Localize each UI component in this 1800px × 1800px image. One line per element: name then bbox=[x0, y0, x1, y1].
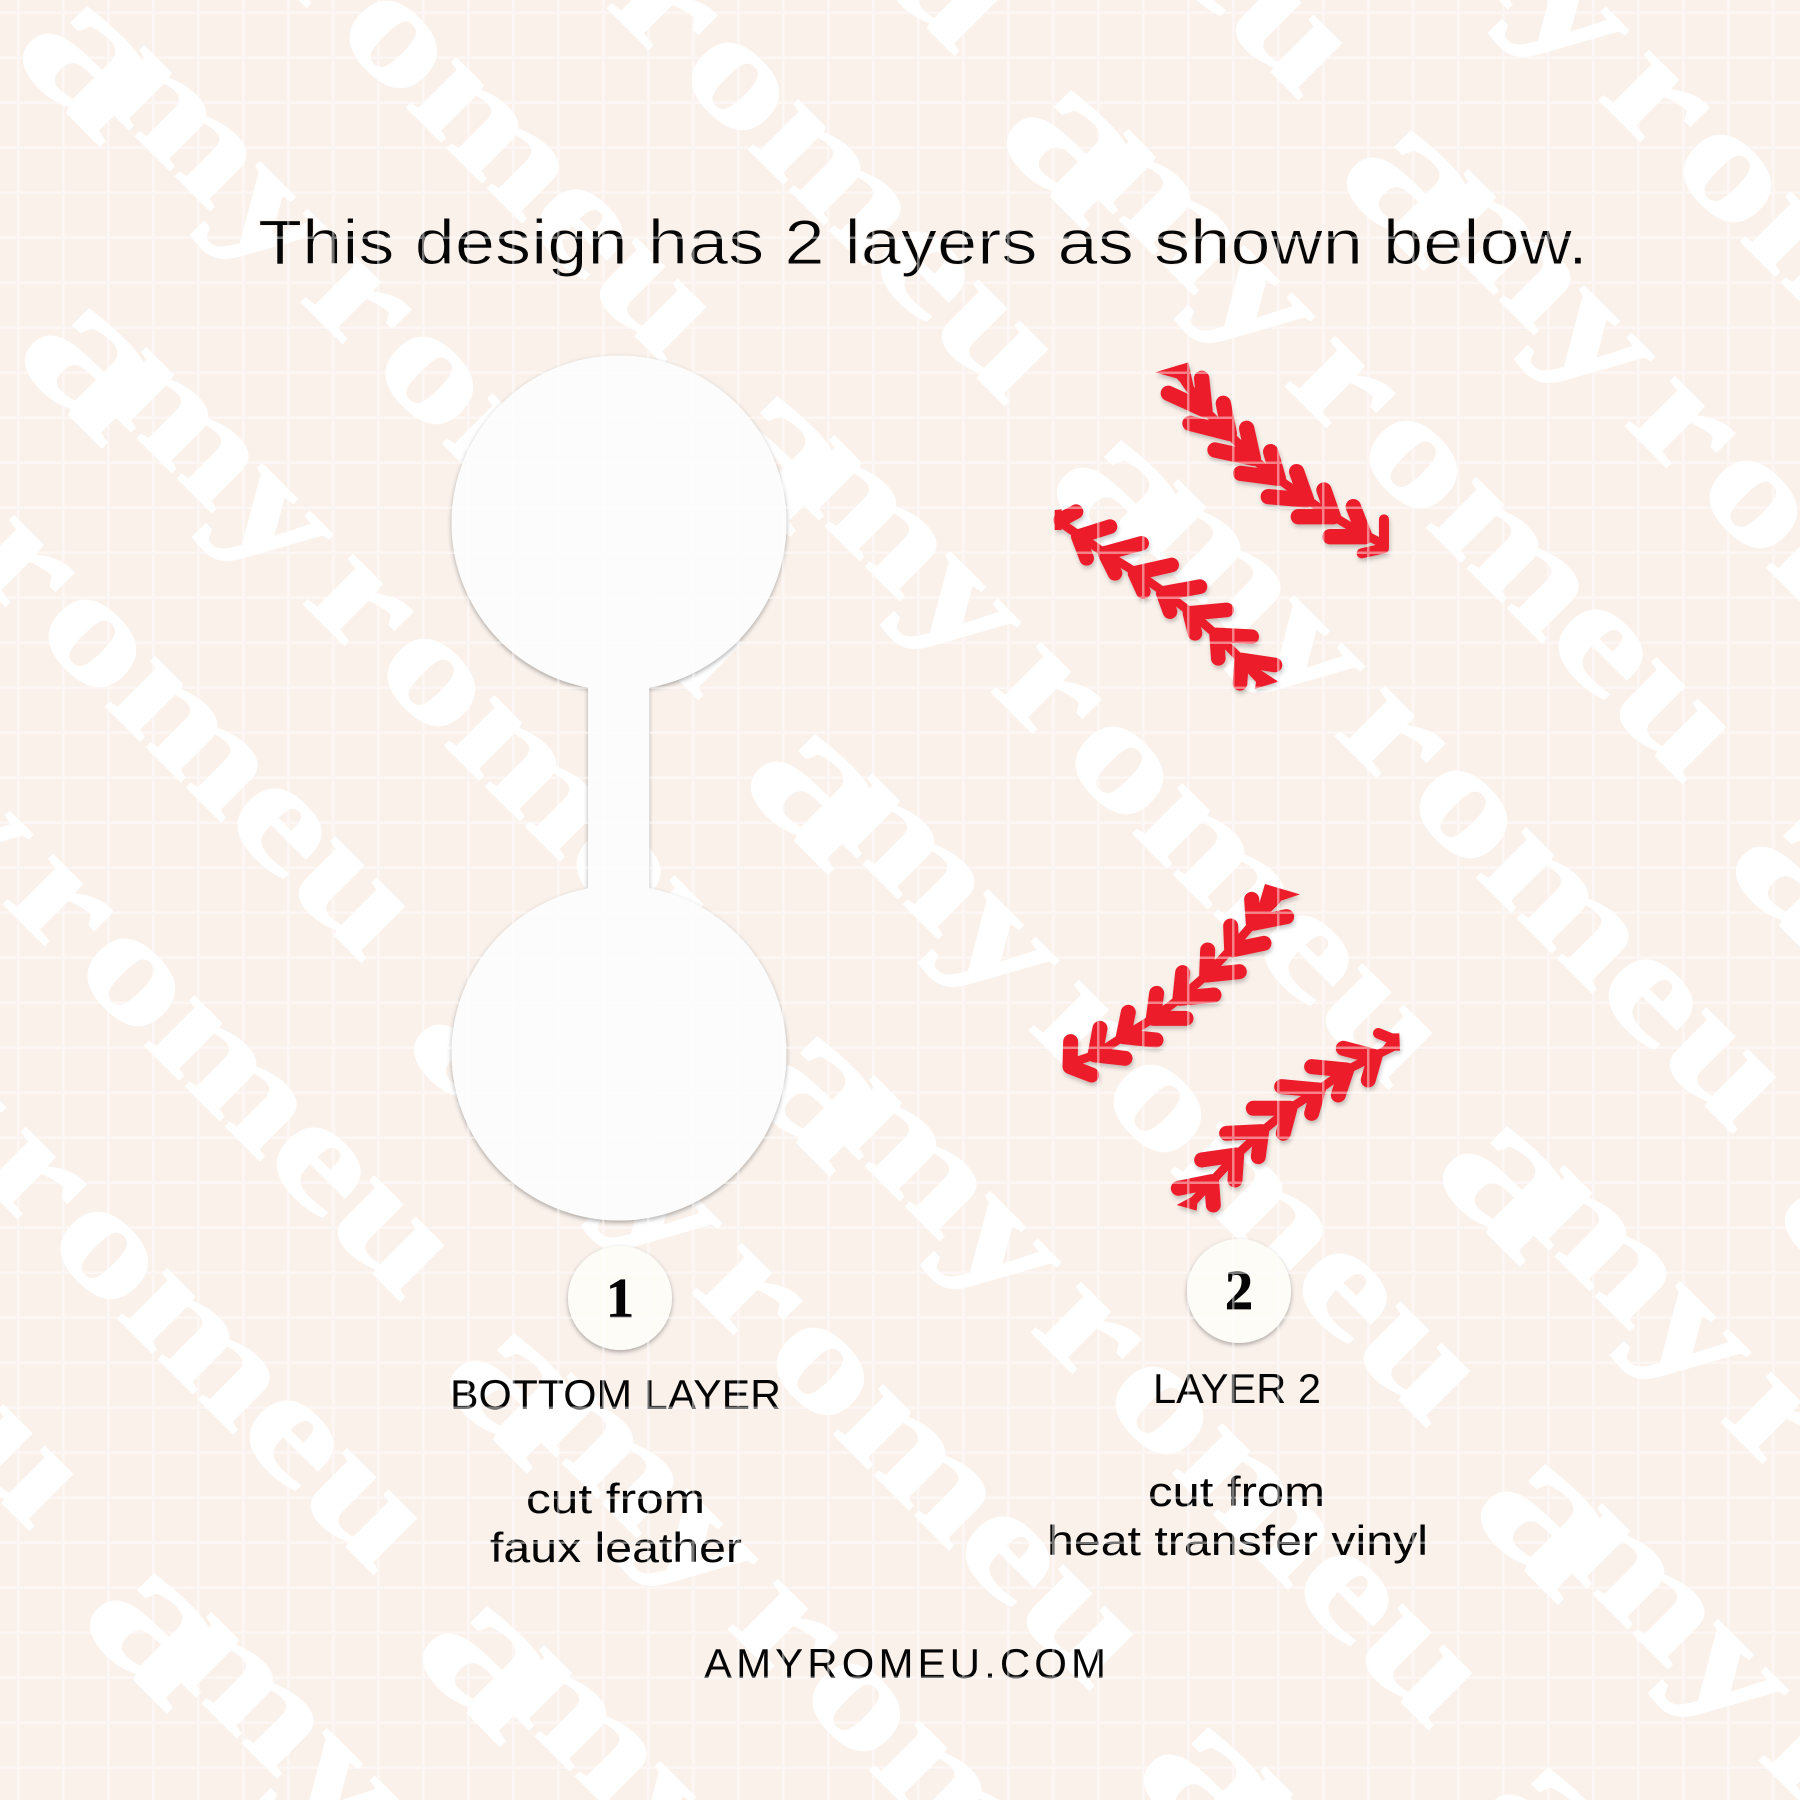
label: layer 2: cut from bbox=[1148, 1468, 1325, 1515]
watermark pattern: myromeu bbox=[71, 299, 799, 1027]
watermark pattern: a bbox=[706, 660, 952, 906]
badge 2: 2 bbox=[1225, 1260, 1253, 1322]
label: bottom layer: BOTTOM LAYER bbox=[450, 1371, 781, 1418]
layer 2 red stitches bbox=[1055, 362, 1400, 1211]
watermark pattern: myromeu bbox=[759, 387, 1487, 1115]
watermark pattern: myromeu bbox=[1053, 81, 1781, 809]
watermark pattern: a bbox=[962, 16, 1208, 262]
watermark pattern: a bbox=[668, 322, 914, 568]
watermark pattern: a bbox=[45, 1499, 291, 1745]
watermark pattern: myromeu bbox=[799, 1027, 1527, 1755]
label: bottom layer: faux leather bbox=[490, 1524, 742, 1571]
label: bottom layer: cut from bbox=[526, 1475, 705, 1522]
badge 2 bbox=[1187, 1239, 1291, 1343]
watermark pattern: a bbox=[1012, 366, 1258, 612]
watermark pattern: myromeu bbox=[797, 725, 1525, 1453]
watermark pattern: a bbox=[378, 1532, 624, 1778]
label: layer 2 bbox=[1047, 1365, 1428, 1564]
stitch: second from top bbox=[1055, 509, 1278, 689]
watermark pattern: a bbox=[1398, 1052, 1644, 1298]
label: layer 2: LAYER 2 bbox=[1153, 1365, 1321, 1412]
website footer: AMYROMEU.COM bbox=[704, 1640, 1106, 1687]
badge 1: 1 bbox=[606, 1268, 634, 1330]
label: layer 2: heat transfer vinyl bbox=[1047, 1517, 1428, 1564]
title: This design has 2 layers as shown below. bbox=[258, 208, 1588, 278]
watermark pattern: a bbox=[405, 1259, 651, 1505]
watermark pattern: myromeu bbox=[69, 0, 797, 725]
watermark pattern: a bbox=[708, 962, 954, 1208]
label: bottom layer bbox=[450, 1371, 781, 1571]
watermark pattern: a bbox=[369, 923, 615, 1169]
watermark pattern: a bbox=[1302, 56, 1548, 302]
layer 1 dumbbell shape bbox=[452, 356, 786, 1220]
stitch: top right bbox=[1155, 362, 1384, 553]
stitch: bottom right bbox=[1177, 1033, 1400, 1211]
badge 1 bbox=[568, 1246, 672, 1350]
stitch: third from top bbox=[1070, 884, 1300, 1075]
watermark pattern: a bbox=[1436, 1390, 1682, 1636]
watermark pattern: myromeu bbox=[460, 988, 1188, 1716]
